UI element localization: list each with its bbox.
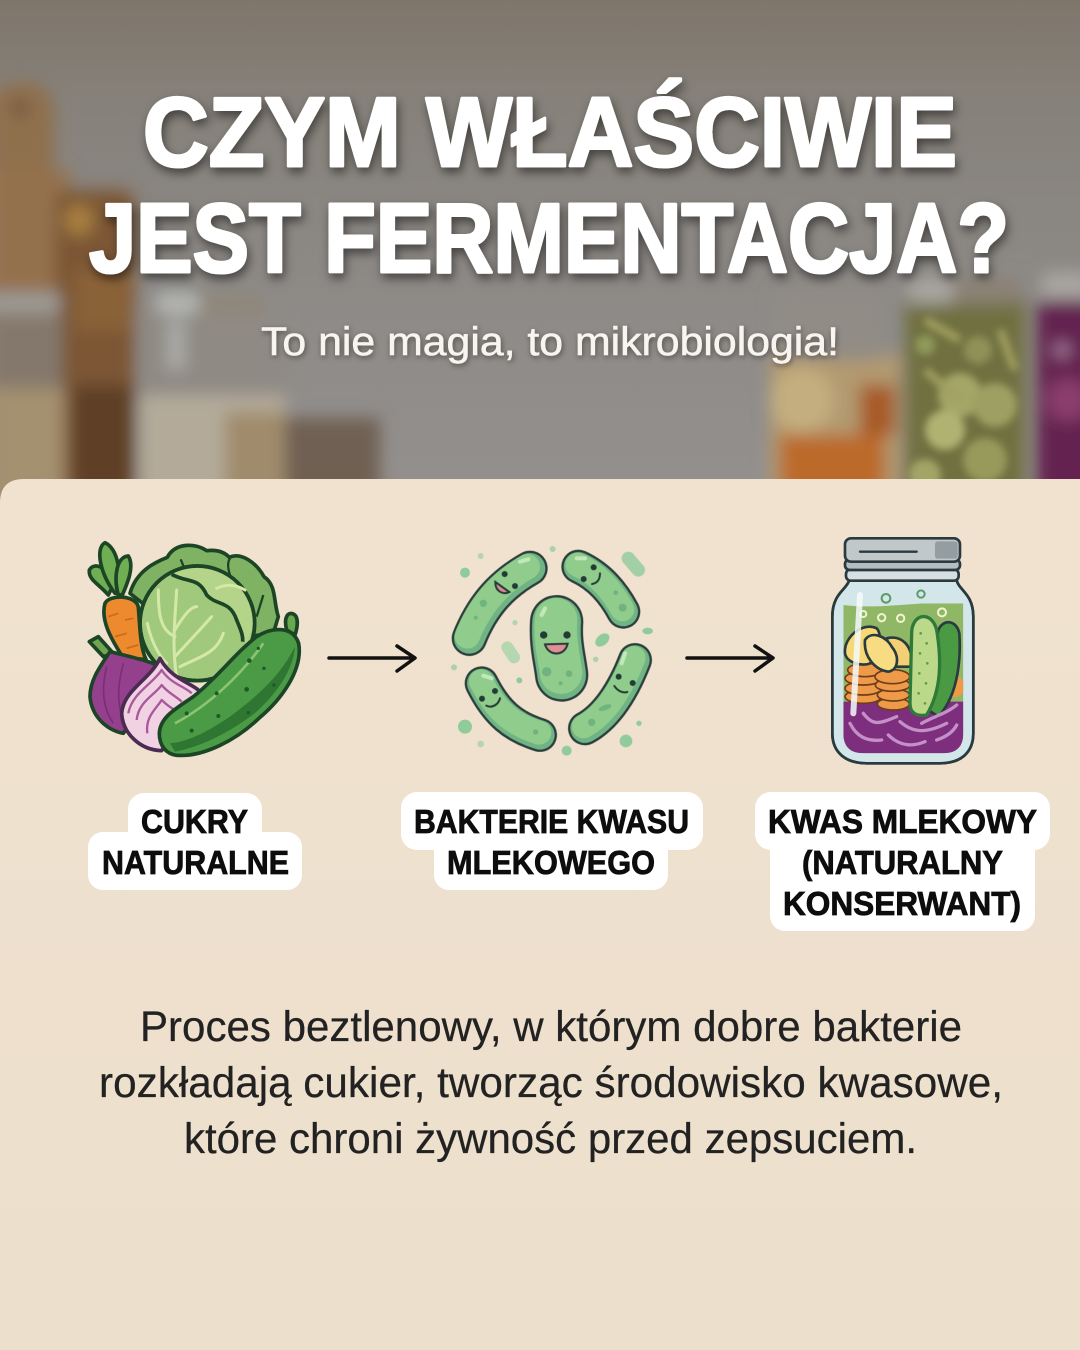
subtitle: To nie magia, to mikrobiologia! [261,320,839,364]
label: lactic acid, natural preservative: (NATURALNY [802,844,1003,881]
icon: fermentation jar [832,538,973,763]
label: lactic acid, natural preservative: KONSERWANT) [783,885,1021,922]
arrow: sugars to bacteria [329,646,415,671]
icon: lactic acid bacteria [451,546,653,756]
panel: fermentation process [0,479,1080,1162]
label: natural sugars: NATURALNE [102,844,289,881]
label: lactic acid bacteria: BAKTERIE KWASU [414,803,689,840]
label: natural sugars: CUKRY [141,803,248,840]
description text: Proces beztlenowy, w którym dobre bakterie [140,1003,962,1051]
label: lactic acid, natural preservative: KWAS MLEKOWY [768,803,1037,840]
label: lactic acid bacteria [401,792,703,890]
description text [99,1003,1003,1163]
title [89,77,1009,293]
label: lactic acid, natural preservative [755,792,1050,931]
description text: które chroni żywność przed zepsuciem. [184,1115,917,1163]
title: CZYM WŁAŚCIWIE [143,77,957,187]
description text: rozkładają cukier, tworząc środowisko kwasowe, [99,1059,1003,1107]
icon: vegetables [89,543,299,755]
arrow: bacteria to lactic acid [687,646,773,671]
label: natural sugars [88,793,302,890]
label: lactic acid bacteria: MLEKOWEGO [447,844,655,881]
background: blurred kitchen shelf photo [0,0,1080,502]
